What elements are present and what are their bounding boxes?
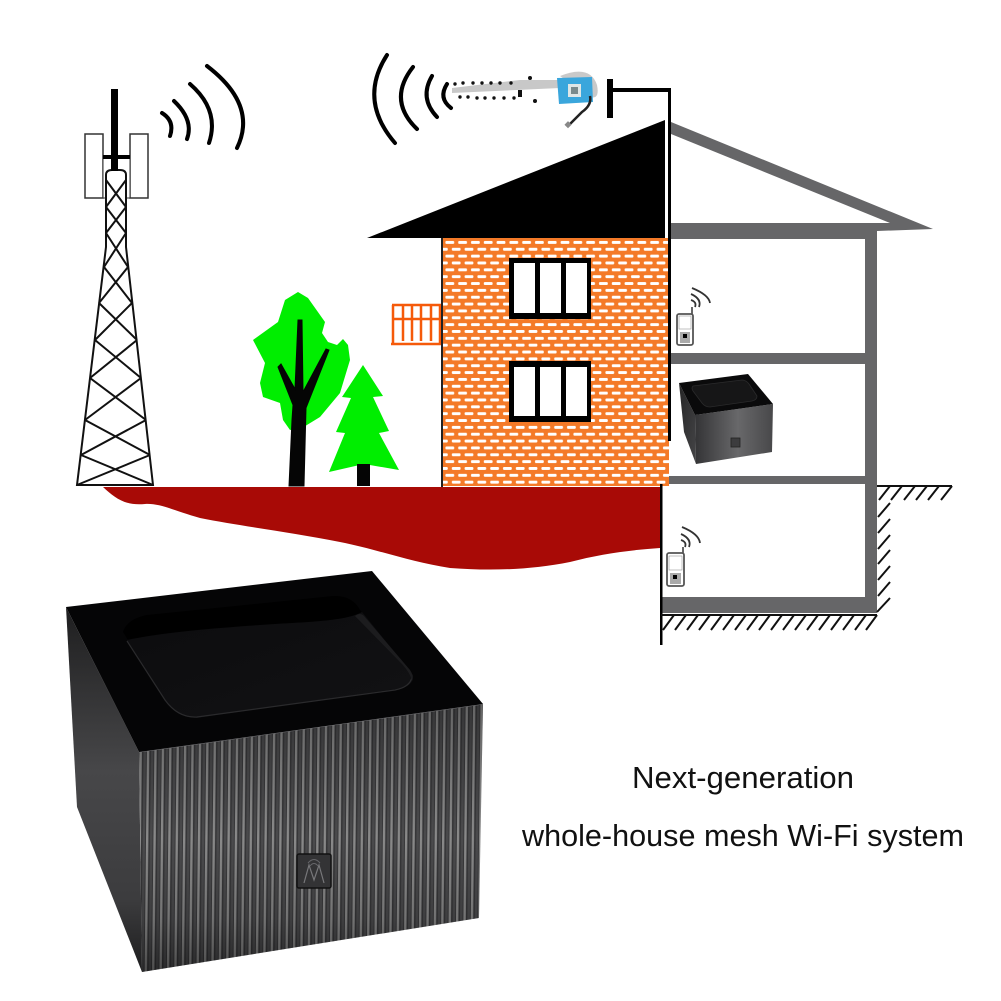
black roof bbox=[367, 120, 665, 238]
balcony bbox=[391, 305, 441, 344]
caption bbox=[521, 760, 964, 853]
router logo badge bbox=[297, 854, 331, 888]
tree bbox=[253, 292, 350, 486]
antenna blue box bbox=[557, 77, 593, 104]
pine tree bbox=[329, 365, 399, 486]
router front ribbed face bbox=[139, 704, 483, 972]
small router top bbox=[679, 374, 773, 415]
small router in diagram bbox=[679, 374, 773, 464]
house brick wall bbox=[441, 238, 669, 487]
phone lower waves bbox=[681, 527, 700, 547]
large router product bbox=[66, 571, 483, 972]
upper floor bbox=[671, 353, 867, 364]
tree trunk bbox=[278, 320, 329, 486]
antenna cable bbox=[570, 96, 590, 124]
small router front bbox=[695, 404, 773, 464]
middle floor bbox=[669, 476, 867, 484]
basement floor bbox=[661, 597, 877, 613]
cell tower bbox=[77, 66, 243, 485]
ground hatching bottom bbox=[661, 615, 877, 630]
right wall bbox=[865, 235, 877, 613]
ground: red soil bbox=[103, 487, 660, 570]
caption line 2: whole-house mesh Wi-Fi system bbox=[521, 818, 964, 853]
phone lower bbox=[667, 527, 700, 586]
router left side bbox=[66, 607, 142, 972]
pine trunk bbox=[357, 464, 370, 486]
antenna signal waves bbox=[374, 55, 451, 143]
caption line 1: Next-generation bbox=[632, 760, 854, 795]
upper window bbox=[509, 258, 591, 319]
house cross-section bbox=[661, 122, 933, 613]
router top recess bbox=[123, 596, 413, 718]
tree foliage bbox=[253, 292, 350, 430]
router top bbox=[66, 571, 483, 752]
phone upper bbox=[677, 288, 710, 345]
black antenna pole and dividing lines bbox=[607, 79, 671, 645]
small router logo bbox=[731, 438, 740, 447]
tower signal waves bbox=[162, 66, 243, 148]
small router left side bbox=[679, 383, 696, 464]
antenna elements bbox=[453, 76, 537, 103]
tower antenna panels bbox=[85, 134, 148, 198]
antenna boom bbox=[452, 80, 560, 93]
lower window bbox=[509, 361, 591, 422]
pine foliage bbox=[329, 365, 399, 472]
tower lattice bbox=[77, 170, 153, 485]
phone upper waves bbox=[691, 288, 710, 307]
tower mast bbox=[103, 89, 130, 171]
ground hatching right bbox=[877, 486, 952, 612]
section roof bbox=[671, 122, 933, 239]
antenna dish back bbox=[560, 72, 598, 98]
yagi antenna bbox=[452, 72, 598, 128]
